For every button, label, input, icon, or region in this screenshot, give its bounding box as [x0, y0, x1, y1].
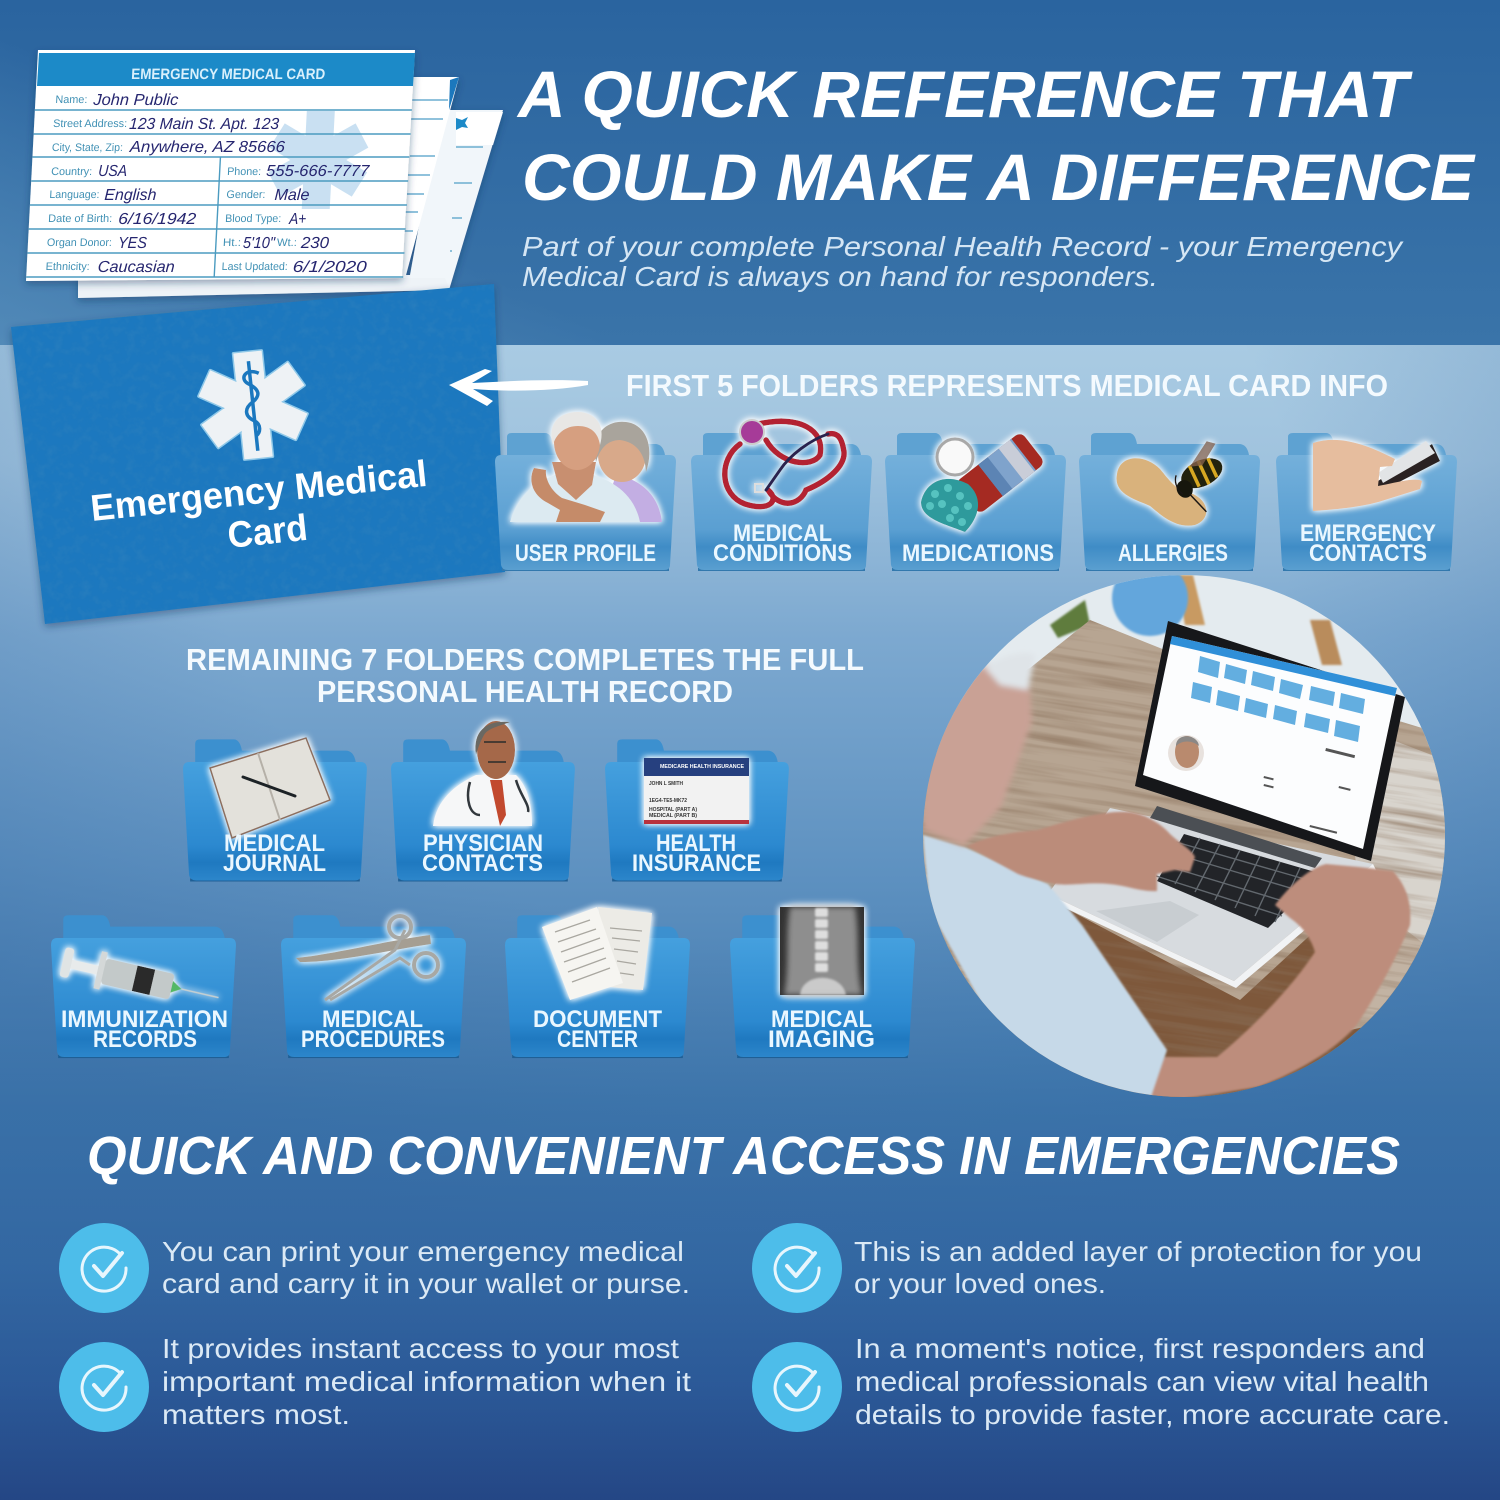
back card pages	[78, 77, 503, 298]
folder label: CONDITIONS	[713, 540, 852, 567]
subtitle: Part of your complete Personal Health Record - your Emergency	[522, 231, 1404, 262]
bullet text: matters most.	[162, 1399, 350, 1430]
subtitle	[522, 231, 1404, 292]
heading: first 5 folders: FIRST 5 FOLDERS REPRESENTS MEDICAL CARD INFO	[626, 368, 1388, 403]
card details: Ethnicity:	[45, 261, 90, 273]
card details: 6/16/1942	[118, 211, 197, 228]
folder: immunization records	[51, 915, 236, 1058]
folder label: PHYSICIAN	[423, 830, 543, 857]
card details: Language:	[49, 189, 100, 201]
card details: A+	[288, 211, 307, 228]
card details: EMERGENCY MEDICAL CARD	[131, 66, 326, 83]
bullet text	[854, 1236, 1422, 1299]
icon: check	[59, 1342, 149, 1432]
folder label: CONTACTS	[422, 850, 543, 877]
laptop base	[1046, 806, 1376, 988]
icon: syringe	[58, 943, 223, 1016]
icon: insurance card	[644, 758, 749, 824]
bullet text: medical professionals can view vital health	[855, 1366, 1429, 1397]
icon: insurance card: HOSPITAL (PART A)	[649, 807, 697, 813]
folder label: ALLERGIES	[1118, 540, 1228, 567]
title: A QUICK REFERENCE THAT	[516, 57, 1413, 131]
card details: 123 Main St. Apt. 123	[129, 116, 280, 133]
folder label	[301, 1006, 445, 1053]
folder label: MEDICAL	[771, 1006, 872, 1033]
card details: Caucasian	[97, 259, 175, 276]
title: COULD MAKE A DIFFERENCE	[522, 140, 1476, 214]
bullet: print card	[59, 1223, 690, 1313]
heading: remaining 7 folders: REMAINING 7 FOLDERS COMPLETES THE FULL	[186, 642, 864, 677]
bullet text	[162, 1333, 691, 1430]
folder label	[61, 1006, 228, 1053]
icon: check	[59, 1223, 149, 1313]
folder label	[1300, 520, 1436, 567]
folder label	[422, 830, 543, 877]
card details: John Public	[92, 92, 179, 109]
room backdrop	[936, 575, 1432, 755]
icon: insurance card: 1EG4-TE5-MK72	[649, 798, 687, 804]
card details: Anywhere, AZ 85666	[128, 139, 285, 156]
folder: allergies	[1079, 433, 1260, 571]
heading: remaining 7 folders	[186, 642, 864, 709]
front card	[26, 50, 415, 281]
card details: Date of Birth:	[48, 213, 113, 225]
card details: 555-666-7777	[266, 163, 371, 180]
card details: Organ Donor:	[47, 237, 112, 249]
folder label: CONTACTS	[1309, 540, 1427, 567]
card details: Last Updated:	[221, 261, 288, 273]
icon: documents	[542, 907, 652, 1000]
card sleeve title: Emergency Medical	[89, 453, 429, 529]
card details: 6/1/2020	[292, 259, 367, 276]
folder: medical procedures	[281, 915, 466, 1058]
folder label: CENTER	[557, 1026, 638, 1053]
card details	[26, 66, 414, 277]
folder label: IMMUNIZATION	[61, 1006, 228, 1033]
bullet text: important medical information when it	[162, 1366, 691, 1397]
bullet: first responders	[752, 1333, 1450, 1432]
bullet text	[162, 1236, 690, 1299]
icon: doctor	[433, 721, 532, 826]
icon: x-ray	[780, 907, 864, 995]
icon: insurance card: MEDICAL (PART B)	[649, 813, 697, 819]
icon: peanut and wasp	[1117, 438, 1240, 526]
bullet text: details to provide faster, more accurate care.	[855, 1399, 1450, 1430]
folder label: USER PROFILE	[515, 540, 656, 567]
bullet: added protection	[752, 1223, 1422, 1313]
bullet: instant access	[59, 1333, 691, 1432]
folder label: JOURNAL	[223, 850, 326, 877]
card details: USA	[98, 163, 128, 180]
icon: hand with phone	[1313, 440, 1440, 511]
folder label	[632, 830, 761, 877]
folder: document center	[505, 907, 690, 1058]
folder label: PROCEDURES	[301, 1026, 445, 1053]
emergency medical card stack	[26, 50, 503, 298]
card details: 230	[299, 235, 329, 252]
card details: Street Address:	[53, 118, 127, 130]
card details: Name:	[55, 94, 88, 106]
subtitle: Medical Card is always on hand for responders.	[522, 261, 1158, 292]
heading: quick and convenient access: QUICK AND CONVENIENT ACCESS IN EMERGENCIES	[87, 1126, 1400, 1186]
photo: person using laptop	[923, 575, 1445, 1097]
folder label: HEALTH	[656, 830, 736, 857]
folder label: MEDICAL	[733, 520, 832, 547]
card details: Male	[274, 187, 310, 204]
bullet text: It provides instant access to your most	[162, 1333, 679, 1364]
wooden table	[923, 620, 1445, 1097]
folder: medical conditions	[691, 420, 872, 571]
folder label: MEDICAL	[224, 830, 325, 857]
folder label: MEDICATIONS	[902, 540, 1054, 567]
card details: 5'10"	[242, 235, 277, 252]
folder label: INSURANCE	[632, 850, 761, 877]
bullet text	[855, 1333, 1450, 1430]
title	[516, 57, 1476, 214]
right hand and arm	[1145, 864, 1410, 1105]
card details: Phone:	[227, 166, 261, 178]
folder: medical journal	[183, 738, 367, 881]
person shirt	[923, 835, 1167, 1100]
folder label: DOCUMENT	[533, 1006, 662, 1033]
icon: senior couple	[510, 412, 662, 522]
folder: health insurance	[605, 739, 789, 881]
panel: blue card sleeve	[0, 280, 510, 630]
laptop screen	[1135, 621, 1405, 861]
folder label	[713, 520, 852, 567]
bullet text: You can print your emergency medical	[162, 1236, 684, 1267]
bullet text: This is an added layer of protection for you	[854, 1236, 1422, 1267]
folder: physician contacts	[391, 721, 575, 881]
icon: star of life	[193, 346, 313, 464]
folder label: MEDICAL	[322, 1006, 423, 1033]
card details: City, State, Zip:	[52, 142, 123, 154]
folder label	[768, 1006, 875, 1053]
icon: pills and bottle	[921, 431, 1045, 532]
folder label: IMAGING	[768, 1026, 875, 1053]
folder: medications	[885, 431, 1066, 571]
folder label: RECORDS	[93, 1026, 197, 1053]
bullet text: or your loved ones.	[854, 1268, 1106, 1299]
arrow	[449, 369, 588, 406]
icon: check	[752, 1223, 842, 1313]
card details: Gender:	[226, 189, 266, 201]
icon: insurance card: MEDICARE HEALTH INSURANCE	[660, 764, 744, 770]
folder label	[533, 1006, 662, 1053]
card details: Wt.:	[277, 237, 297, 249]
bullet text: In a moment's notice, first responders and	[855, 1333, 1425, 1364]
icon: open journal	[210, 738, 330, 838]
card details: Country:	[51, 166, 92, 178]
card details: YES	[117, 235, 148, 252]
card details: Blood Type:	[225, 213, 282, 225]
icon: stethoscope	[725, 420, 844, 507]
folder: user profile	[495, 412, 676, 571]
icon: insurance card: JOHN L SMITH	[649, 781, 683, 787]
folder label: EMERGENCY	[1300, 520, 1436, 547]
left hand	[967, 812, 1195, 891]
card details: Ht.:	[223, 237, 241, 249]
heading: remaining 7 folders: PERSONAL HEALTH RECORD	[317, 674, 733, 709]
icon: scalpel and forceps	[296, 916, 438, 1000]
bullet text: card and carry it in your wallet or purse.	[162, 1268, 690, 1299]
folder: medical imaging	[730, 907, 915, 1058]
folder: emergency contacts	[1276, 433, 1457, 571]
card details: English	[104, 187, 157, 204]
icon: check	[752, 1342, 842, 1432]
card sleeve title: Card	[226, 507, 309, 556]
folder label	[223, 830, 326, 877]
card watermark star	[266, 111, 370, 209]
person head	[923, 653, 1035, 846]
